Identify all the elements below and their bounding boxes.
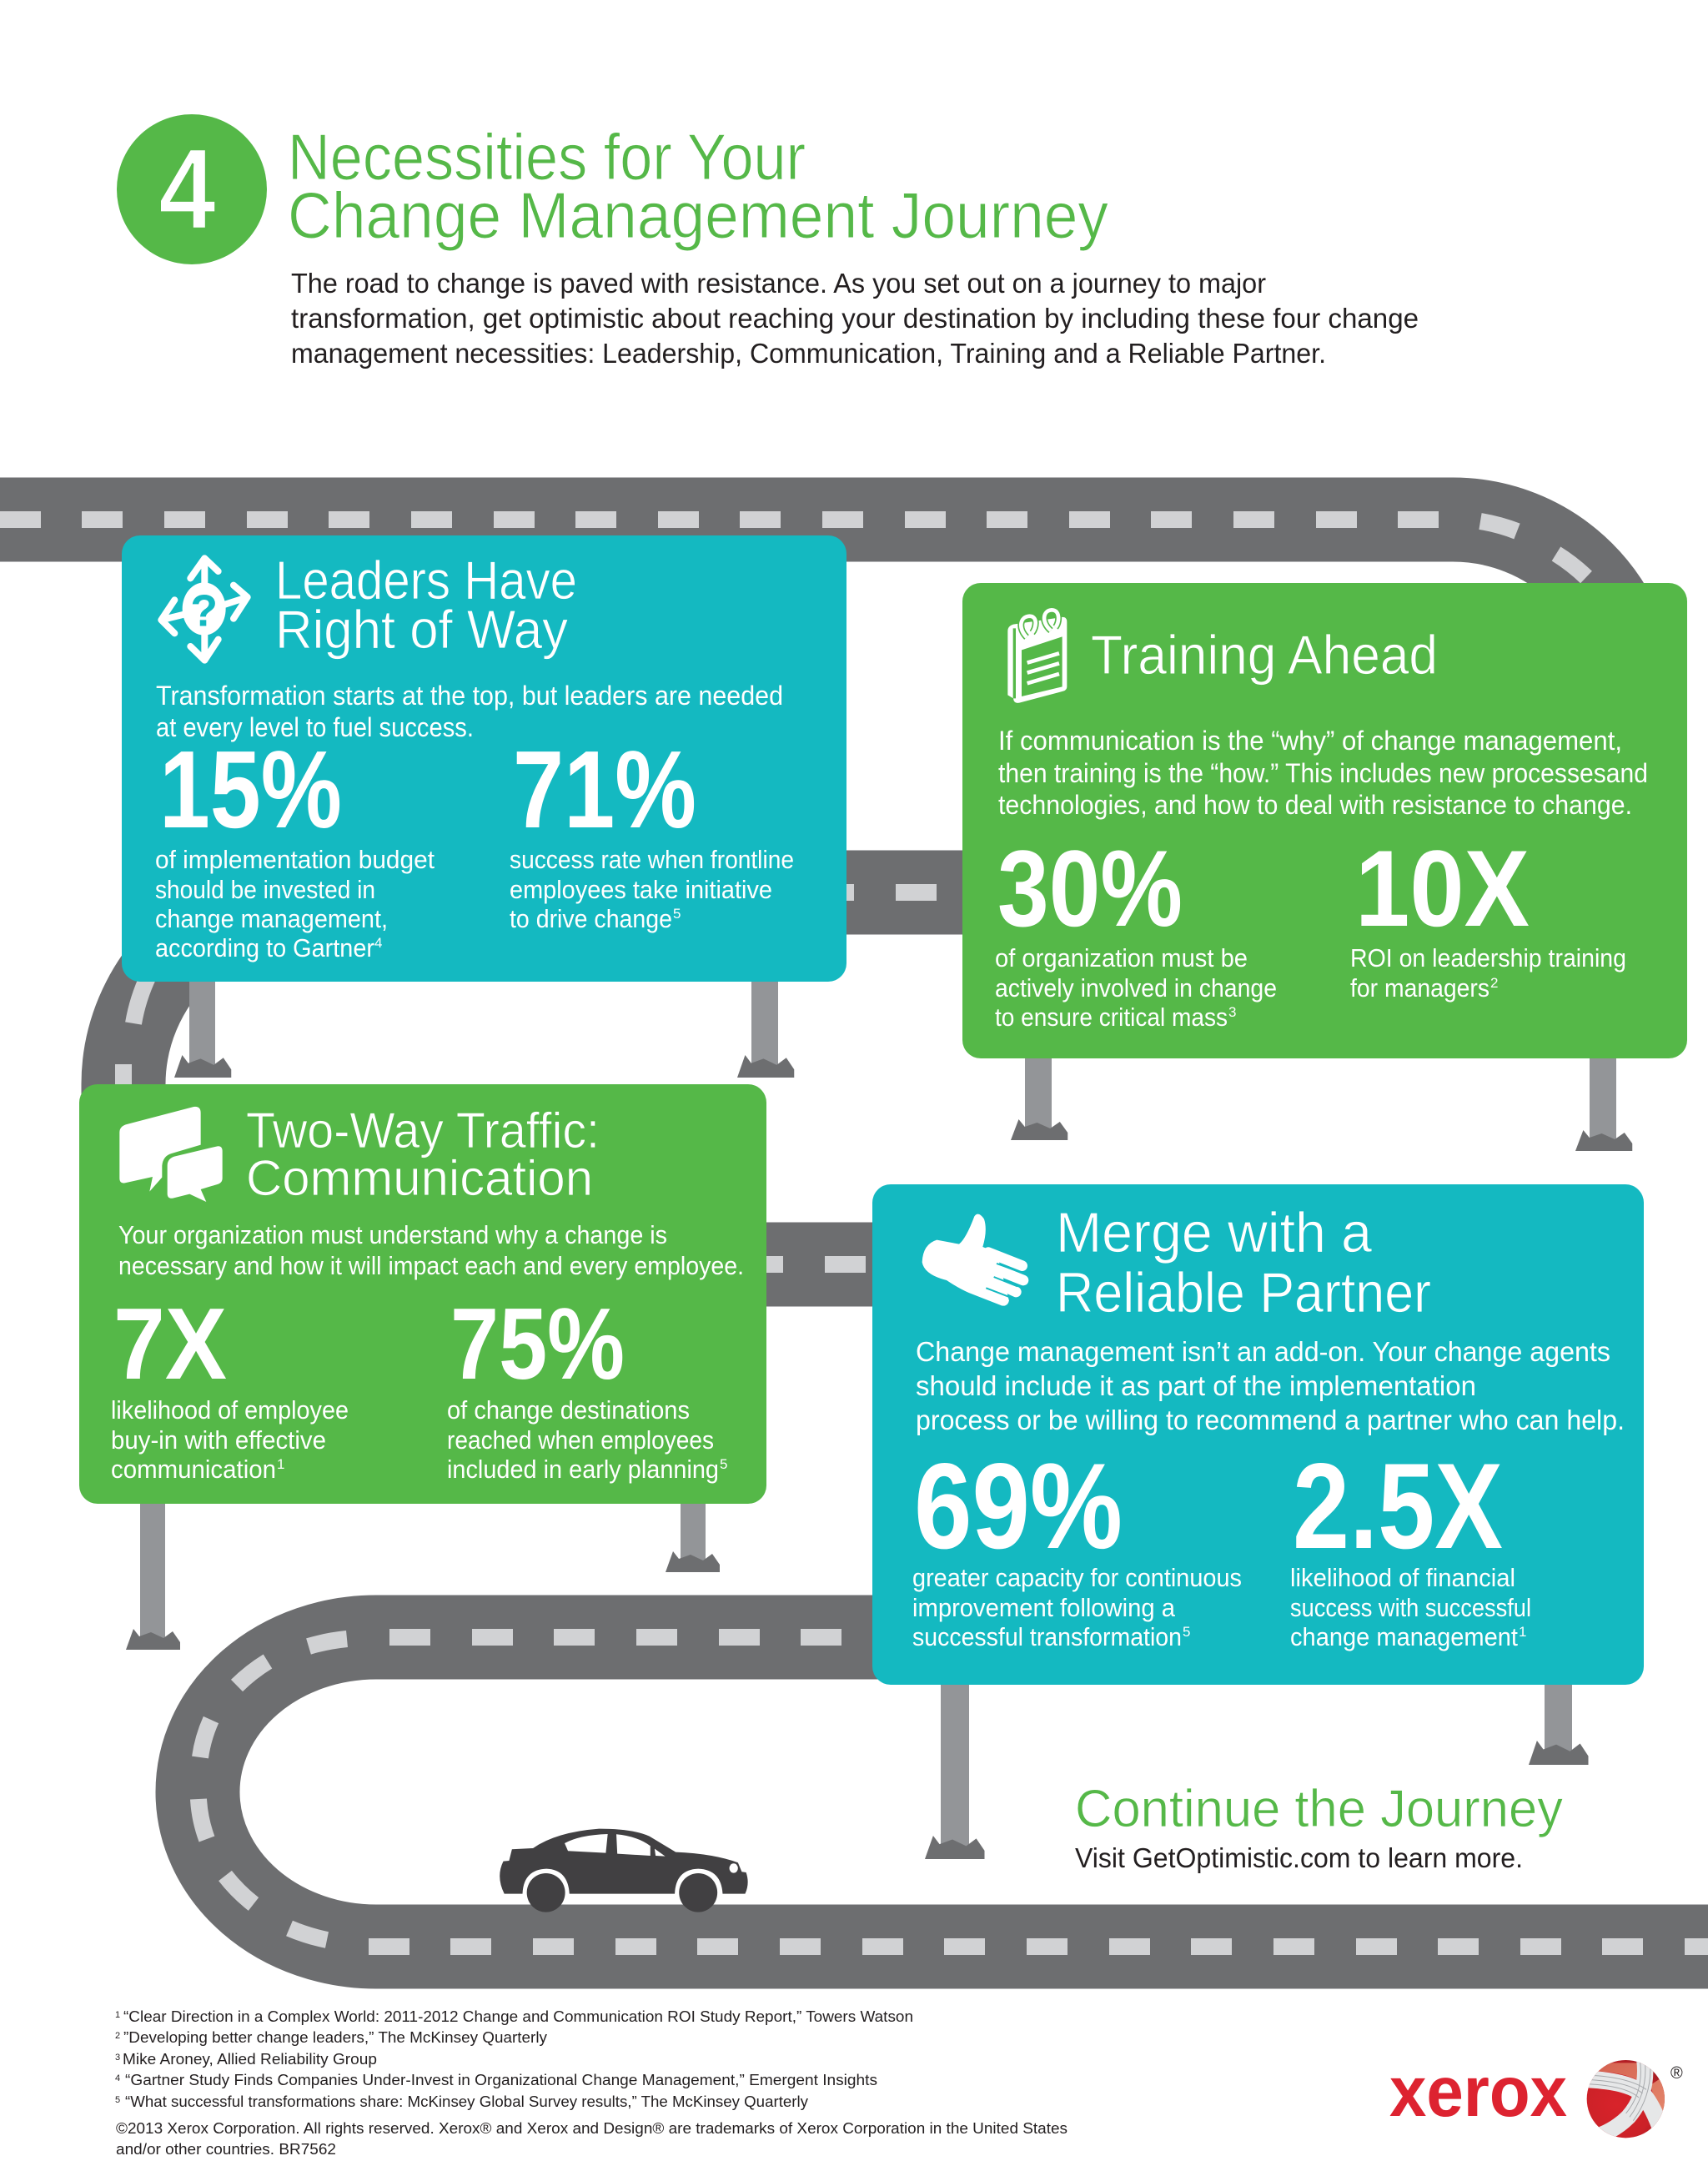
panel: leaders: [122, 535, 846, 982]
stat: 2.5X: 2.5X: [1293, 1438, 1503, 1574]
stat: 7X: 7X: [113, 1287, 227, 1400]
title: Necessities for Your: [288, 120, 806, 193]
body text: Transformation starts at the top, but leaders are needed: [156, 681, 783, 711]
stat: 30%: of organization must be: [995, 943, 1248, 972]
logo: xerox: [1389, 2053, 1683, 2138]
stat: 10X: [1350, 827, 1626, 1003]
icon: handshake hand: [922, 1214, 1023, 1306]
panel: training: [962, 583, 1687, 1058]
stat: 30%: 3: [1228, 1004, 1236, 1020]
stat: 69%: improvement following a: [912, 1593, 1176, 1622]
stat: 2.5X: [1290, 1438, 1531, 1651]
footnotes: 3: [115, 2053, 120, 2063]
stat: 7X: [111, 1287, 349, 1484]
stat: 69%: successful transformation: [912, 1622, 1182, 1651]
footnotes: 2: [115, 2031, 120, 2041]
stat: 30%: actively involved in change: [995, 973, 1277, 1003]
title: Change Management Journey: [288, 178, 1108, 252]
sign posts: [126, 976, 1632, 1859]
stat: 69%: 69%: [914, 1438, 1123, 1574]
stat: 7X: likelihood of employee: [111, 1395, 349, 1425]
stat: 15%: change management,: [155, 904, 388, 933]
intro text: management necessities: Leadership, Communication, Training and a Reliable Partner.: [291, 338, 1326, 369]
body text: necessary and how it will impact each and every employee.: [118, 1251, 744, 1280]
stat: 30%: to ensure critical mass: [995, 1003, 1228, 1032]
stat: 2.5X: 1: [1519, 1624, 1526, 1640]
icon: car: [500, 1829, 748, 1912]
stat: 71%: to drive change: [510, 904, 672, 933]
logo: xerox: xerox: [1389, 2053, 1567, 2132]
footnotes: [115, 2008, 1068, 2158]
stat: 75%: 75%: [450, 1287, 625, 1400]
body text: [156, 681, 783, 742]
stat: 75%: [447, 1287, 727, 1484]
heading: Reliable Partner: [1056, 1261, 1431, 1324]
logo: xerox: ®: [1670, 2064, 1683, 2083]
heading: [1056, 1201, 1431, 1324]
stat: 7X: 1: [277, 1456, 284, 1472]
stat: 2.5X: success with successful: [1290, 1593, 1531, 1622]
stat: 2.5X: change management: [1290, 1622, 1518, 1651]
footnotes: 1: [115, 2010, 120, 2020]
heading: Training Ahead: [1091, 624, 1438, 686]
road: [0, 520, 1708, 1947]
intro text: [291, 268, 1419, 369]
footnotes: ”Developing better change leaders,” The McKinsey Quarterly: [123, 2029, 547, 2046]
icon: notepad: [1007, 610, 1067, 703]
stat: 75%: of change destinations: [447, 1395, 690, 1425]
heading: [246, 1103, 600, 1206]
footnotes: Mike Aroney, Allied Reliability Group: [123, 2051, 377, 2068]
body text: process or be willing to recommend a partner who can help.: [916, 1405, 1625, 1435]
stat: 10X: 10X: [1355, 827, 1530, 949]
stat: 71%: success rate when frontline: [510, 845, 794, 874]
heading: Communication: [246, 1150, 593, 1206]
body text: [998, 726, 1648, 820]
heading: [275, 550, 577, 660]
stat: 69%: 5: [1183, 1624, 1190, 1640]
stat: 15%: 15%: [159, 728, 342, 851]
stat: 10X: 2: [1490, 975, 1498, 991]
stat: 71%: 71%: [513, 728, 696, 851]
body text: Change management isn’t an add-on. Your change agents: [916, 1336, 1610, 1367]
footnotes: “Gartner Study Finds Companies Under-Invest in Organizational Change Management,” Emergent Insights: [125, 2072, 877, 2088]
stat: 15%: 4: [374, 935, 382, 951]
stat: 7X: buy-in with effective: [111, 1425, 326, 1455]
header: badge and title: [117, 114, 1419, 369]
call to action: continue the journey: Continue the Journey: [1075, 1780, 1563, 1838]
footnotes: “What successful transformations share: McKinsey Global Survey results,” The McKinsey Quarterly: [125, 2093, 808, 2110]
stat: 15%: of implementation budget: [155, 845, 435, 874]
footnotes: “Clear Direction in a Complex World: 2011-2012 Change and Communication ROI Study Report,” Towers Watson: [123, 2008, 913, 2025]
footnotes: ©2013 Xerox Corporation. All rights reserved. Xerox® and Xerox and Design® are trademarks of Xerox Corporation in the United States: [116, 2120, 1068, 2137]
footnotes: 4: [115, 2073, 120, 2083]
heading: Right of Way: [275, 599, 568, 660]
call to action: continue the journey: Visit GetOptimistic.com to learn more.: [1075, 1842, 1523, 1873]
footnotes: and/or other countries. BR7562: [116, 2141, 336, 2158]
stat: 71%: employees take initiative: [510, 875, 772, 904]
badge: number 4: 4: [158, 125, 216, 254]
stat: 75%: 5: [720, 1456, 727, 1472]
footnotes: 5: [115, 2095, 120, 2105]
stat: 71%: [510, 728, 794, 933]
body text: then training is the “how.” This includes new processesand: [998, 758, 1648, 788]
logo sphere: [1584, 2058, 1667, 2138]
title: [288, 120, 1108, 252]
stat: 2.5X: likelihood of financial: [1290, 1563, 1515, 1592]
stat: 30%: 30%: [997, 827, 1183, 949]
body text: at every level to fuel success.: [156, 712, 474, 742]
intro text: transformation, get optimistic about reaching your destination by including these four change: [291, 303, 1419, 334]
stat: 7X: communication: [111, 1455, 276, 1484]
stat: 30%: [995, 827, 1277, 1032]
icon: crossroads question: ?: [190, 587, 218, 636]
stat: 71%: 5: [673, 906, 681, 922]
stat: 75%: reached when employees: [447, 1425, 714, 1455]
call to action: continue the journey: [1075, 1780, 1563, 1873]
body text: should include it as part of the implementation: [916, 1370, 1476, 1401]
stat: 15%: according to Gartner: [155, 933, 374, 962]
badge: number 4: [117, 114, 267, 264]
intro text: The road to change is paved with resistance. As you set out on a journey to major: [291, 268, 1266, 299]
heading: Leaders Have: [275, 550, 577, 611]
body text: Your organization must understand why a change is: [118, 1220, 667, 1249]
body text: If communication is the “why” of change management,: [998, 726, 1622, 756]
heading: Two-Way Traffic:: [246, 1103, 600, 1158]
panel: communication: [79, 1084, 766, 1504]
icon: speech bubbles: [119, 1107, 223, 1202]
stat: 10X: ROI on leadership training: [1350, 943, 1626, 972]
stat: 69%: [912, 1438, 1242, 1651]
body text: [916, 1336, 1625, 1435]
heading: Merge with a: [1056, 1201, 1372, 1264]
stat: 15%: [155, 728, 435, 962]
icon: crossroads question: [161, 558, 248, 661]
panel: partner: [872, 1184, 1644, 1685]
body text: technologies, and how to deal with resistance to change.: [998, 790, 1632, 820]
body text: [118, 1220, 744, 1280]
stat: 15%: should be invested in: [155, 875, 375, 904]
stat: 69%: greater capacity for continuous: [912, 1563, 1242, 1592]
stat: 10X: for managers: [1350, 973, 1489, 1003]
stat: 75%: included in early planning: [447, 1455, 719, 1484]
